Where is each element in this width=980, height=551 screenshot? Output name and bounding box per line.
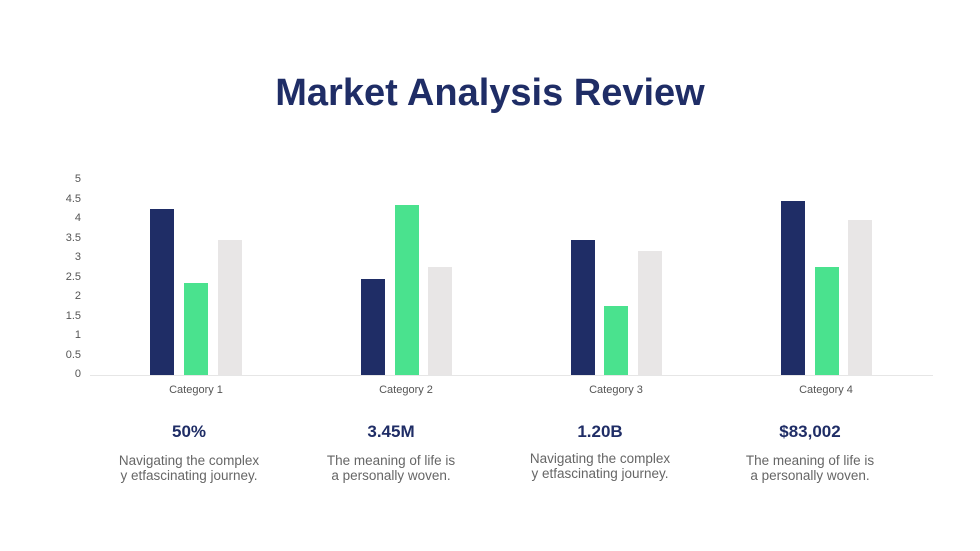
stat 4: [746, 422, 874, 483]
stat 3: y etfascinating journey.: [531, 466, 669, 481]
stat 3: [530, 422, 670, 481]
category labels: [169, 384, 853, 396]
bar chart: [66, 173, 933, 380]
stat 1: y etfascinating journey.: [120, 468, 258, 483]
category labels: Category 2: [379, 384, 433, 396]
stat 4: a personally woven.: [750, 468, 870, 483]
stat 2: The meaning of life is: [327, 453, 455, 468]
category labels: Category 4: [799, 384, 853, 396]
stat 2: [327, 422, 455, 483]
y axis labels: 0.5: [66, 349, 81, 361]
stat 4: $83,002: [779, 422, 841, 441]
y axis labels: 1.5: [66, 310, 81, 322]
stat 1: 50%: [172, 422, 206, 441]
y axis labels: 1: [75, 329, 81, 341]
y axis labels: 2.5: [66, 271, 81, 283]
stat 2: 3.45M: [367, 422, 415, 441]
stat 1: Navigating the complex: [119, 453, 259, 468]
stat 1: [119, 422, 259, 483]
y axis labels: 4: [75, 212, 81, 224]
y axis labels: 3: [75, 251, 81, 263]
title: Market Analysis Review: [275, 72, 705, 114]
category labels: Category 1: [169, 384, 223, 396]
bars: [150, 201, 872, 375]
y axis labels: [66, 173, 81, 380]
y axis labels: 5: [75, 173, 81, 185]
category labels: Category 3: [589, 384, 643, 396]
y axis labels: 3.5: [66, 232, 81, 244]
y axis labels: 2: [75, 290, 81, 302]
y axis labels: 4.5: [66, 193, 81, 205]
stat 3: Navigating the complex: [530, 451, 670, 466]
stat 2: a personally woven.: [331, 468, 451, 483]
y axis labels: 0: [75, 368, 81, 380]
stat 4: The meaning of life is: [746, 453, 874, 468]
stat 3: 1.20B: [577, 422, 623, 441]
